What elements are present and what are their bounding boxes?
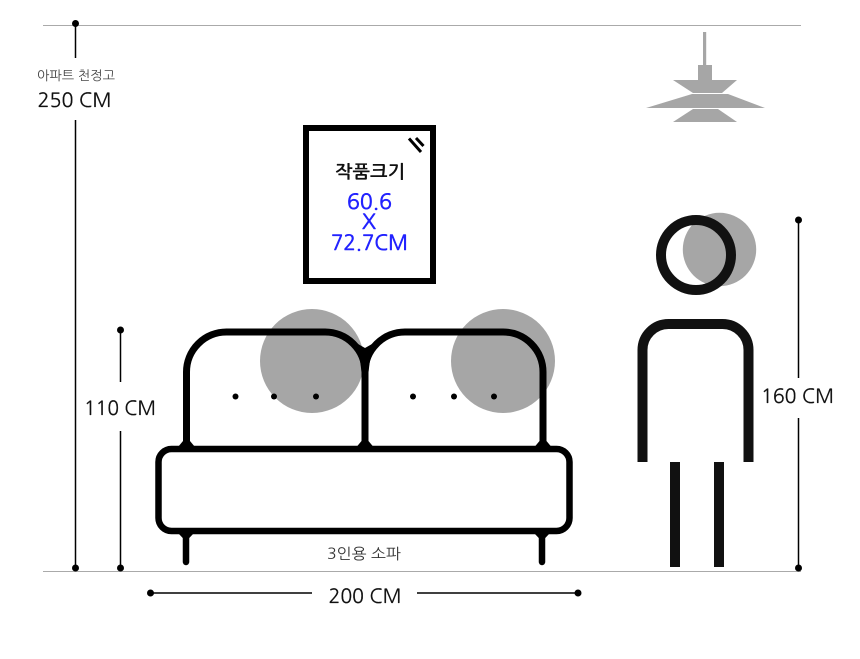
cushion buttons (232, 394, 497, 400)
sofa back cushions (186, 332, 543, 449)
person height dimension: 160 CM (761, 216, 834, 572)
sofa width dimension: 200 CM (147, 586, 582, 606)
artwork frame: 작품크기 (335, 162, 405, 181)
ceiling height dimension: 250 CM (37, 20, 115, 572)
artwork frame: X (362, 211, 376, 232)
sofa label: 3인용 소파 (327, 546, 402, 562)
leg fillets (178, 533, 550, 538)
sofa illustration (158, 309, 570, 562)
artwork frame: 72.7CM (331, 232, 408, 253)
person legs (670, 462, 724, 567)
sofa width dimension: 200 CM: 200 CM (328, 586, 402, 606)
person height dimension: 160 CM: 160 CM (761, 386, 834, 406)
person head (661, 220, 731, 290)
ceiling height dimension: 250 CM: 250 CM (38, 90, 112, 110)
artwork frame (306, 128, 433, 281)
cushion junction (358, 344, 372, 372)
sofa back height dimension: 110 CM: 110 CM (84, 398, 156, 418)
person shadow circle (683, 213, 756, 286)
sofa seat (158, 449, 570, 531)
sofa shadow circles (260, 309, 555, 413)
pendant lamp icon (646, 32, 765, 122)
cushion fillets (178, 441, 552, 447)
sofa back height dimension: 110 CM (84, 326, 156, 572)
ceiling height dimension: 250 CM: 아파트 천정고 (37, 69, 115, 82)
artwork frame: 60.6 (347, 191, 392, 212)
person figure (642, 213, 756, 567)
sofa legs (186, 532, 542, 562)
person torso (642, 324, 748, 462)
